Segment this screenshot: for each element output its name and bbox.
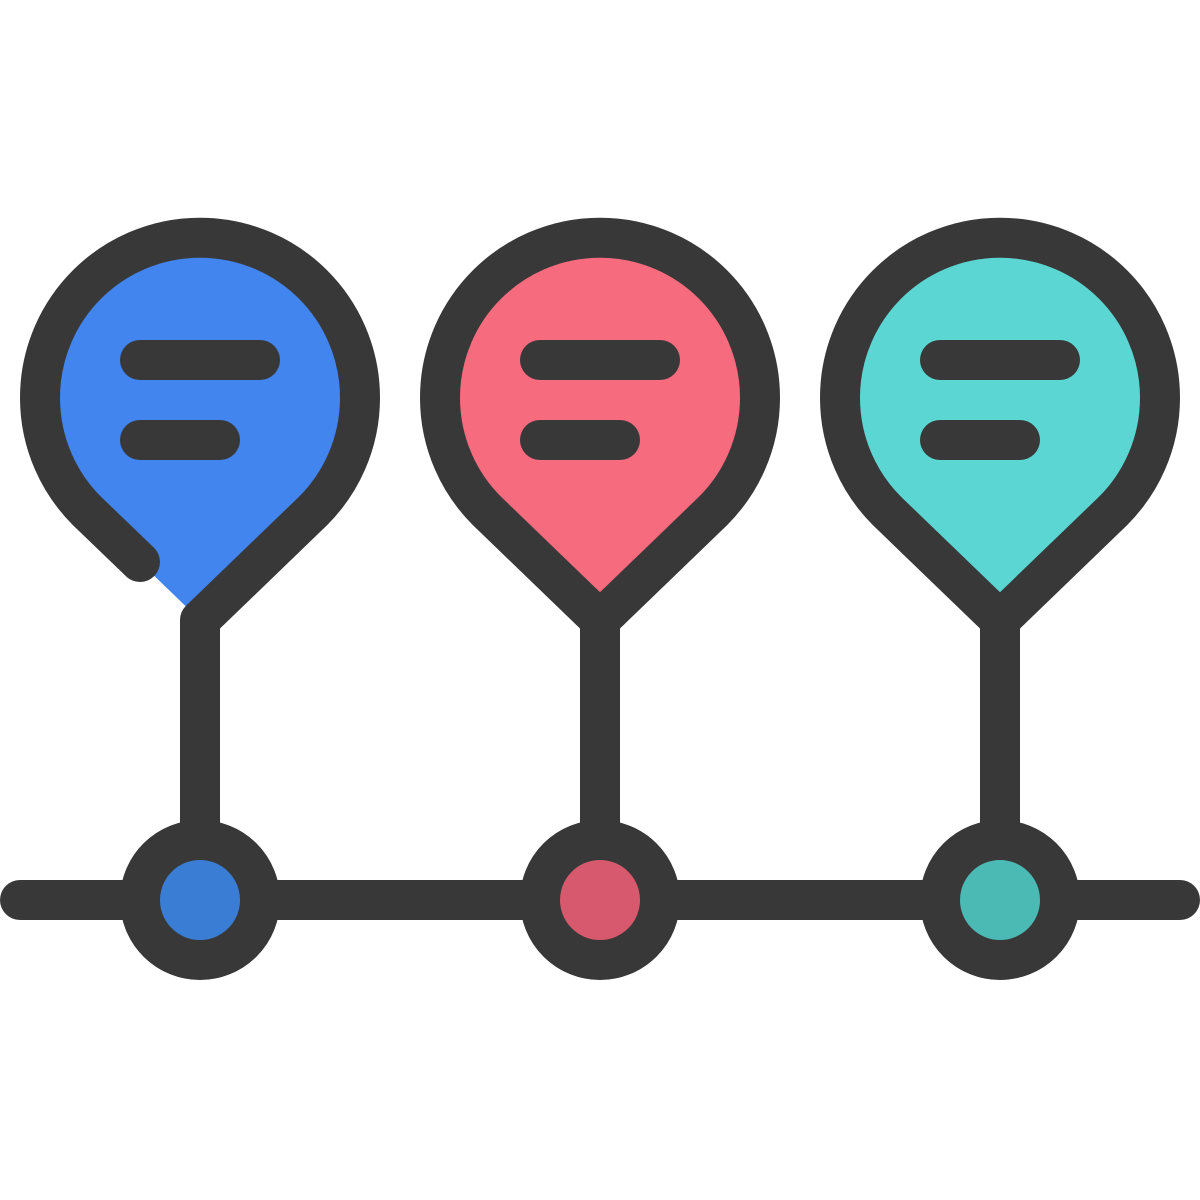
marker: blue pin (40, 238, 360, 960)
timeline axis (20, 880, 1180, 920)
marker: teal pin (840, 238, 1160, 960)
marker: pink pin (440, 238, 760, 960)
